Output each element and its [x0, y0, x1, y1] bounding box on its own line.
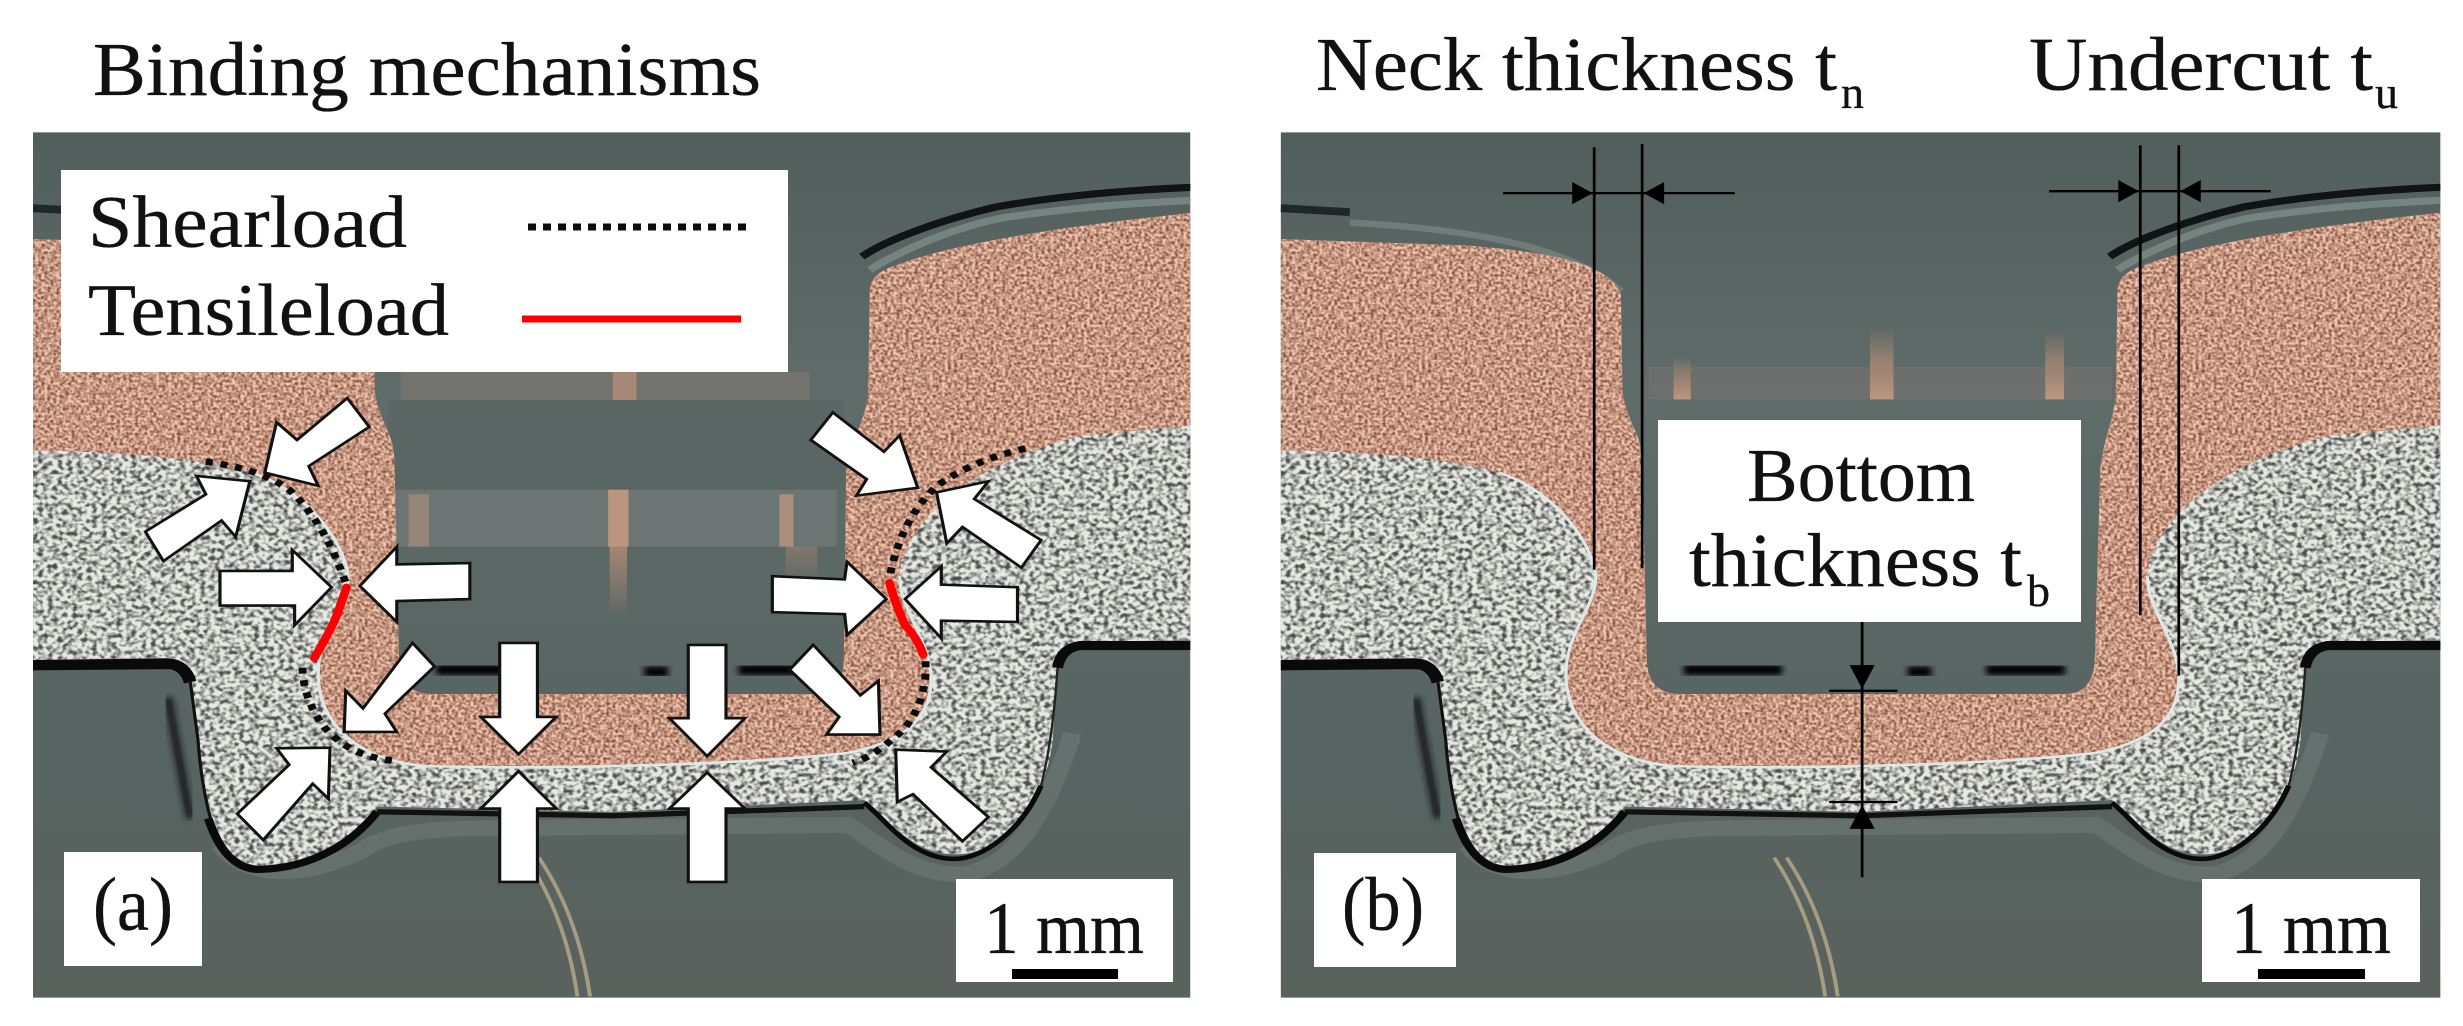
micrograph a [33, 132, 1194, 998]
bottom thickness label: Bottom [1747, 434, 1975, 518]
panel label (b) [1314, 853, 1456, 967]
legend: Tensileload [88, 270, 449, 352]
legend: Shearload [88, 182, 407, 264]
load arrows [145, 398, 1041, 882]
scale bar a [956, 879, 1173, 982]
steel sheet b [1281, 426, 2440, 866]
heading: undercut: Undercut t [2029, 23, 2373, 107]
legend [61, 170, 788, 372]
bottom thickness label: thickness t [1689, 519, 2022, 603]
micrograph b [1281, 132, 2442, 998]
scale bar b: 1 mm [2231, 888, 2391, 970]
steel sheet a [33, 426, 1193, 866]
heading: neck thickness: Neck thickness t [1316, 23, 1837, 107]
copper sheet a [33, 213, 1193, 773]
panel label (a): (a) [93, 863, 173, 947]
panel label (a) [64, 852, 202, 966]
panel a: binding mechanisms micrograph [33, 132, 1194, 998]
panel label (b): (b) [1342, 863, 1424, 947]
scale bar a: 1 mm [984, 888, 1144, 970]
scale bar b [2202, 879, 2420, 982]
tensile load red curves [314, 583, 923, 658]
bottom thickness label: b [2027, 565, 2050, 616]
copper sheet b [1281, 213, 2440, 773]
bottom thickness label [1658, 420, 2081, 622]
panel b: thickness measures micrograph [1281, 23, 2442, 998]
heading: undercut: u [2375, 67, 2398, 118]
shear load dotted curves [206, 448, 1025, 763]
bottom thickness dimension lines [1829, 622, 1897, 877]
heading: neck thickness: n [1841, 67, 1864, 118]
undercut dimension lines [2049, 145, 2271, 676]
title: binding mechanisms: Binding mechanisms [93, 28, 761, 112]
neck thickness dimension lines [1503, 144, 1735, 570]
